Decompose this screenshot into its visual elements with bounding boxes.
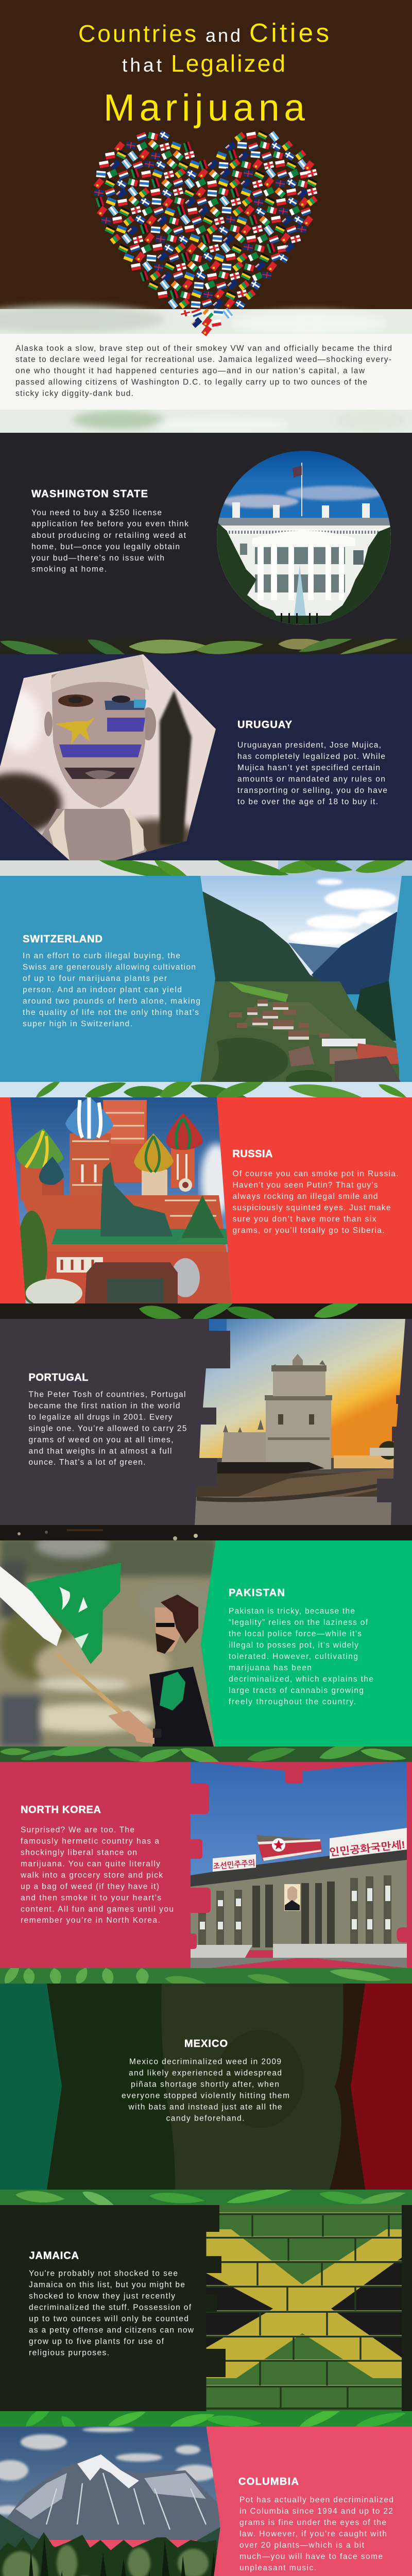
title: and [205,25,241,46]
panel: Uruguay [0,654,412,871]
leaf strip 2 [0,853,412,886]
body text: freely throughout the country. [229,1698,356,1706]
panel: Mexico [0,1984,412,2190]
body text: decriminalized the stuff. Possession of [29,2303,192,2312]
body text: grow up to five plants for use of [29,2337,164,2346]
body text: up a bag of weed (if they have it) [21,1883,159,1891]
heading: WASHINGTON STATE [31,488,148,500]
title: Marijuana [104,87,305,129]
body text: The Peter Tosh of countries, Portugal [29,1390,185,1399]
body text: ounce. That’s a lot of green. [29,1458,145,1467]
heading: COLUMBIA [238,2476,299,2487]
body text: Pakistan is tricky, because the [229,1607,355,1616]
body text: transporting or selling, you do have [237,786,387,795]
body text: single one. You’re allowed to carry 25 [29,1424,186,1433]
body text: your bud—there’s no issue with [31,554,164,563]
panel: Portugal [0,1319,412,1525]
intro text: passed allowing citizens of Washington D.C. to legally carry up to two ounces of the [15,378,367,386]
intro text: one who thought it had happened centuries ago—and in our nation's capital, a law [15,367,365,375]
body text: sure you don’t have more than six [233,1215,376,1224]
header background [0,0,412,309]
body text: person. And an indoor plant can yield [23,986,182,994]
leaf strip 7 [0,1960,412,1992]
body text: content. All fun and games until you [21,1905,174,1913]
body text [122,2058,289,2123]
title: that [122,55,162,76]
photo: White House [216,451,391,629]
heading: SWITZERLAND [23,934,102,945]
body text: piñata shortage shortly after, when [131,2080,279,2089]
body text [20,1826,174,1925]
body text: grams of weed on you at all times, [29,1435,173,1445]
heading: RUSSIA [233,1148,273,1160]
intro text: state to declare weed legal for recreational use. Jamaica legalized weed—shocking every- [15,355,391,364]
body text: You're probably not shocked to see [29,2269,178,2278]
title [78,18,329,129]
body text: Of course you can smoke pot in Russia. [233,1170,399,1178]
body text [233,1170,399,1235]
body text [229,1607,373,1706]
photo: Swiss alpine valley [193,876,407,1089]
body text: about producing or retailing weed at [31,531,186,540]
panel: Pakistan [0,1534,412,1747]
body text [31,509,188,574]
photo: North Korean government building [191,1762,407,1968]
title: Countries [78,20,196,47]
intro leaf background band [0,306,412,433]
body text: marijuana has been [229,1664,312,1672]
panel: Russia [0,1096,412,1308]
flag heart [94,130,318,336]
intro text [15,344,392,398]
body text: of up to four marijuana plants per [23,974,167,983]
heading: PAKISTAN [229,1587,285,1599]
body text: up to two ounces will only be counted [29,2314,188,2324]
body text: suspiciously squinted eyes. Just make [233,1204,390,1212]
leaf strip 4 [0,1295,412,1325]
leaf strip 3 [0,1075,412,1110]
body text: famously hermetic country has a [21,1837,159,1845]
photo: Belem Tower [191,1319,407,1525]
body text: Haven’t you seen Putin? That guy’s [233,1181,378,1190]
photo: North Korean government building: 인민공화국만세! [329,1840,406,1858]
body text [23,952,200,1028]
body text: law. However, if you’re caught with [239,2530,387,2538]
body text: became the first nation in the world [29,1401,180,1411]
photo: Jamaican flag on brick wall [206,2205,403,2411]
body text: to legalize all drugs in 2001. Every [29,1413,173,1422]
body text: the quality of life not the only thing that’s [23,1008,199,1017]
title: Cities [249,18,329,47]
title: Legalized [171,50,285,77]
photo: man waving Pakistan flag [0,1534,216,1747]
body text: amounts or mandated any rules on [237,775,385,784]
body text: grams is fine under the eyes of the [239,2518,386,2527]
leaf strip 6 [0,1735,412,1769]
body text: grams, or you’ll totally go to Siberia. [233,1226,384,1235]
body text: and then smoke it to your heart’s [21,1894,161,1902]
body text: always rocking an illegal smile and [233,1192,378,1201]
body text: around two pounds of herb alone, making [23,997,200,1006]
heading: PORTUGAL [29,1372,89,1383]
body text: Uruguayan president, Jose Mujica, [237,741,381,750]
body text: shockingly liberal stance on [21,1849,137,1857]
body text: much—you will have to face some [239,2552,383,2561]
body text: unpleasant music. [239,2564,316,2572]
body text: “legality” relies on the laziness of [229,1618,368,1627]
body text: application fee before you even think [31,519,188,529]
body text: illegal to posses pot, it’s widely [229,1641,358,1650]
body text: home, but—once you legally obtain [31,543,180,551]
body text: and likely experienced a widespread [129,2069,282,2077]
body text: Mujica hasn’t yet specified certain [237,764,380,772]
body text: marijuana. You can quite literally [21,1860,160,1868]
body text: as a petty offense and citizens can now [29,2326,194,2335]
body text [239,2496,393,2572]
intro text: sticky icky diggity-dank bud. [15,389,133,398]
photo: Saint Basil's Cathedral [0,1096,237,1308]
body text: Surprised? We are too. The [21,1826,134,1834]
body text: religious purposes. [29,2348,109,2358]
leaf strip 8 [0,2183,412,2212]
heading: URUGUAY [237,719,293,731]
photo: North Korean government building: 조선민주주의 [213,1859,255,1871]
panel: Columbia [0,2427,412,2576]
panel: Switzerland [0,876,412,1089]
body text [29,1390,186,1467]
heading: JAMAICA [29,2250,79,2262]
body text: has completely legalized pot. While [237,752,385,761]
photo: snowy mountain and forest [0,2427,221,2576]
body text: the local police force—while it’s [229,1630,362,1638]
body text: In an effort to curb illegal buying, the [23,952,180,960]
leaf strip 9 [0,2399,412,2438]
body text: large tracts of cannabis growing [229,1686,364,1695]
body text: everyone stopped violently hitting them [122,2092,289,2100]
body text: tolerated. However, cultivating [229,1652,358,1661]
leaf strip 1 [0,629,412,665]
heading: MEXICO [184,2038,228,2049]
intro white panel [0,334,412,410]
body text: to be over the age of 18 to buy it. [237,798,378,806]
body text: Swiss are generously allowing cultivation [23,963,196,972]
body text: with bats and instead just ate all the [128,2103,282,2111]
body text: decriminalized, which explains the [229,1675,373,1684]
body text: in Columbia since 1994 and up to 22 [239,2507,393,2516]
body text: Mexico decriminalized weed in 2009 [129,2058,281,2066]
panel: Jamaica [0,2205,412,2411]
body text: Pot has actually been decriminalized [239,2496,393,2504]
body text: You need to buy a $250 license [31,509,162,517]
body text: shocked to know they just recently [29,2292,175,2301]
photo: face painted with Uruguay flag [0,654,216,871]
panel: North Korea [0,1762,412,1968]
body text [237,741,387,806]
body text: Jamaica on this list, but you might be [29,2280,185,2290]
panel: Washington State [0,433,412,639]
flag background: Mexican flag [0,1984,412,2190]
body text: smoking at home. [31,565,107,574]
body text: super high in Switzerland. [23,1020,132,1028]
leaf strip 5 [0,1525,412,1540]
body text: over 20 plants—which is a bit [239,2541,365,2550]
body text: candy beforehand. [166,2114,244,2123]
intro text: Alaska took a slow, brave step out of their smokey VW van and officially became the third [15,344,392,353]
body text [29,2269,194,2358]
body text: and that weighs in at almost a full [29,1447,172,1456]
body text: remember you’re in North Korea. [21,1916,160,1925]
body text: walk into a grocery store and pick [20,1871,163,1879]
heading: NORTH KOREA [21,1804,101,1816]
